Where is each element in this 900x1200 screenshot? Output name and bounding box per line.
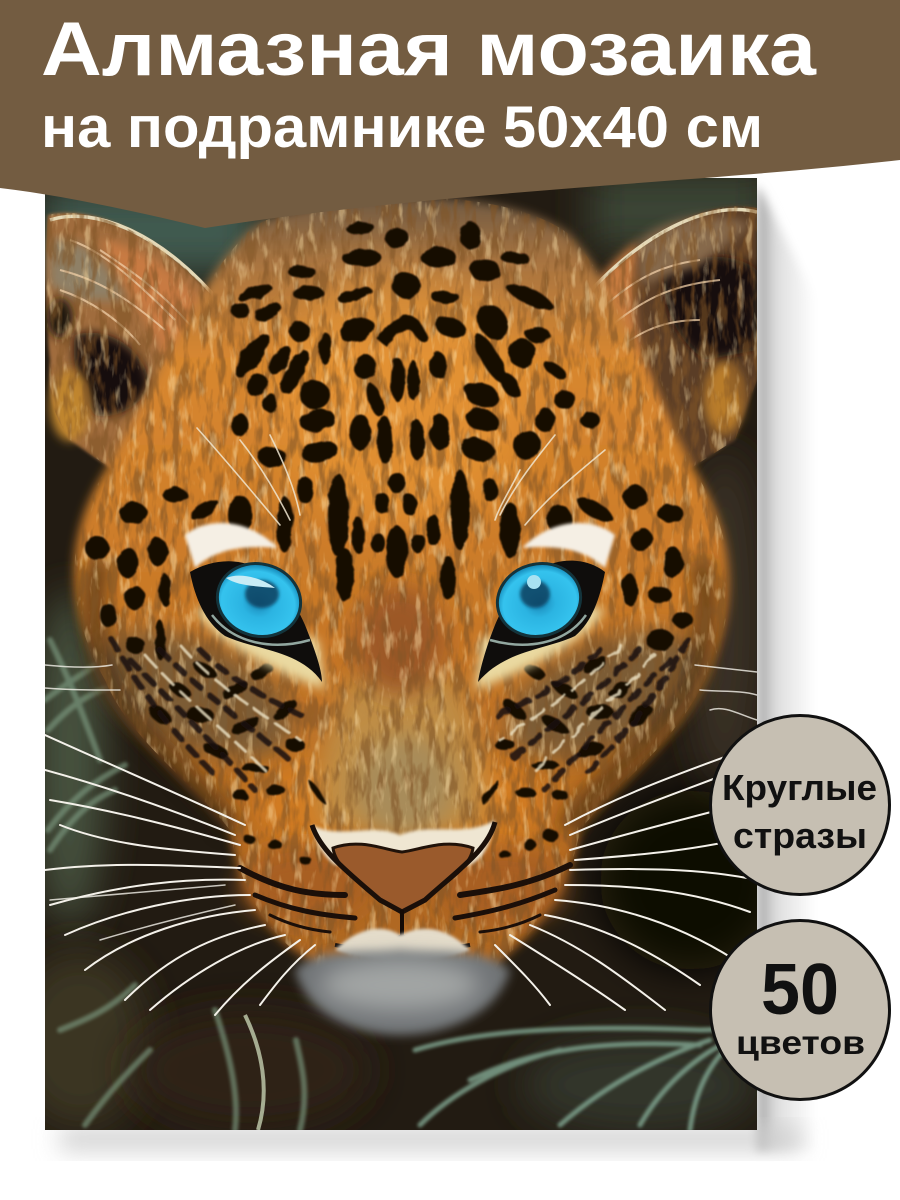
badge: 50 colours [710, 920, 890, 1100]
badge: 50 colours: 50 [761, 950, 839, 1030]
head fur base [74, 197, 729, 1012]
subtitle: на подрамнике 50х40 см [41, 95, 763, 160]
whiskers [45, 665, 757, 1015]
banner [0, 0, 900, 228]
forehead whiskers [197, 428, 605, 525]
right ear [595, 205, 757, 468]
chin [295, 950, 510, 1035]
cheek mottling [112, 640, 688, 790]
canvas drop shadow [60, 185, 815, 1150]
right eye [475, 523, 615, 690]
leopard painting [10, 170, 780, 1135]
fur texture [46, 198, 757, 962]
badge: round rhinestones: стразы [733, 815, 867, 856]
leopard spots [85, 221, 693, 864]
badge: 50 colours: цветов [736, 1024, 865, 1061]
left ear [45, 210, 212, 469]
painting background with grass [10, 170, 780, 1135]
badge: round rhinestones: Круглые [722, 767, 877, 808]
muzzle bridge [318, 585, 486, 835]
left eye [185, 523, 325, 690]
badge: round rhinestones [710, 716, 890, 894]
title: Алмазная мозаика [41, 7, 817, 92]
nose and mouth [312, 820, 495, 961]
muzzle stripes [240, 865, 570, 932]
